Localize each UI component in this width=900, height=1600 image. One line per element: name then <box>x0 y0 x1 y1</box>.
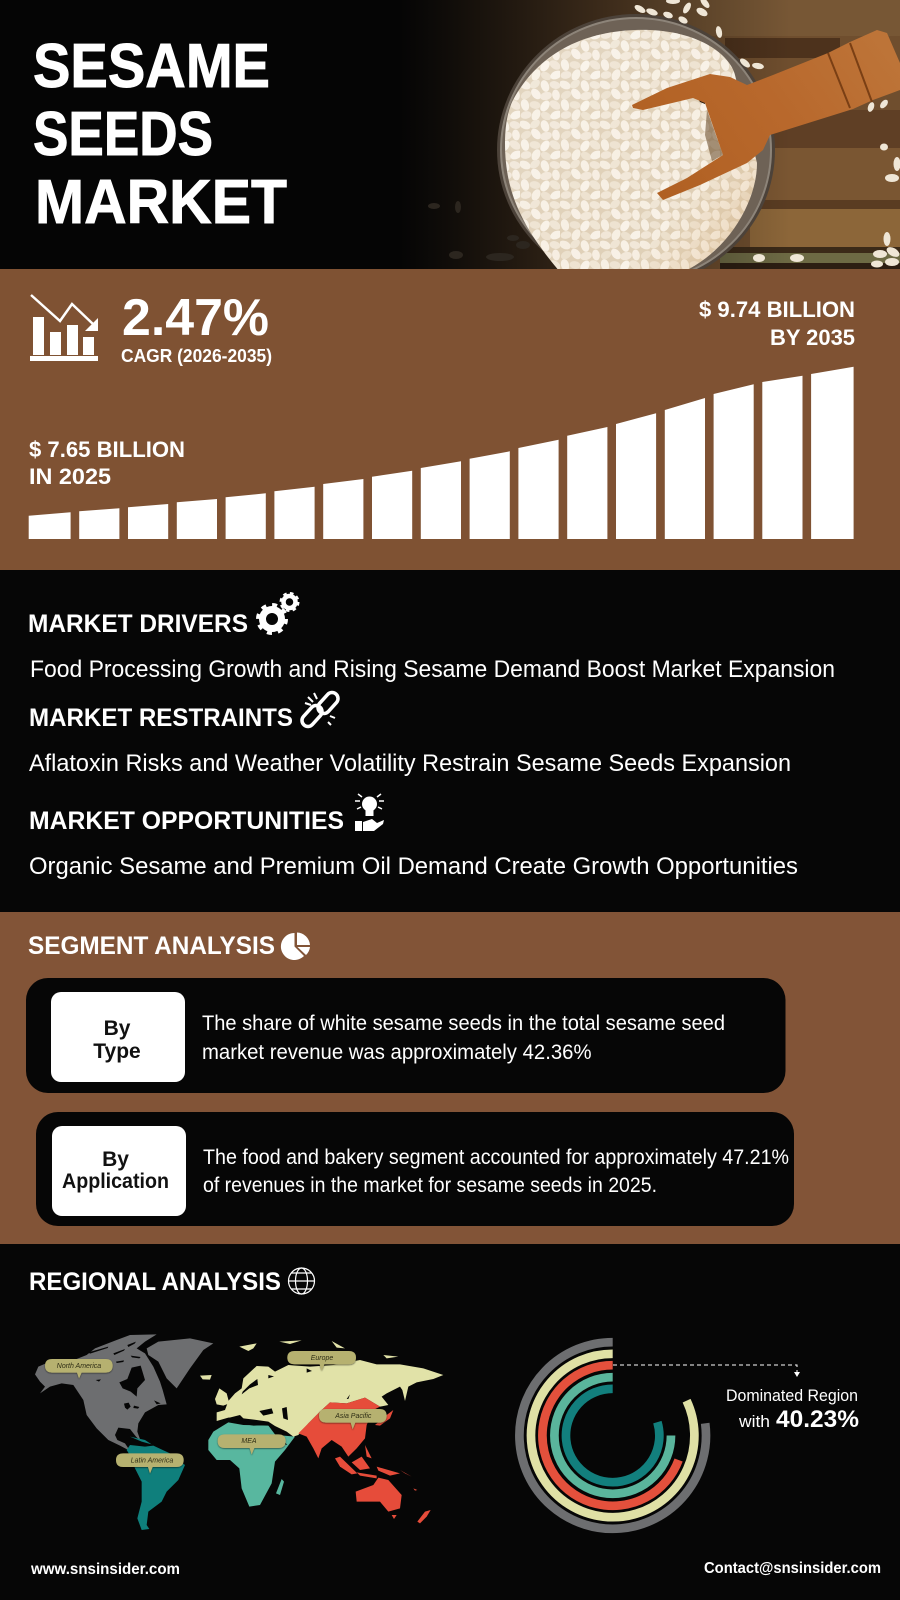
text: by application: The food and bakery segment accounted for approximately 47.21% <box>203 1146 789 1169</box>
icon: broken chain link <box>300 690 340 729</box>
2025 value label <box>29 437 185 489</box>
2035 value label: BY 2035 <box>770 325 855 350</box>
map callouts <box>45 1351 387 1474</box>
callout: North America: North America <box>57 1363 101 1370</box>
label box: by type: Type <box>93 1040 141 1063</box>
heading: segment analysis: SEGMENT ANALYSIS <box>28 932 275 960</box>
region: Asia Pacific <box>298 1398 431 1523</box>
label box: by application: Application <box>62 1170 169 1193</box>
callout: MEA: MEA <box>241 1438 257 1445</box>
region: Middle East and Africa <box>208 1422 295 1507</box>
icon: globe <box>288 1268 314 1294</box>
text: by application: of revenues in the market for sesame seeds in 2025. <box>203 1174 657 1197</box>
CAGR label: CAGR (2026-2035) <box>121 346 272 366</box>
label box: by application <box>52 1126 186 1216</box>
callout: Europe <box>287 1351 356 1371</box>
panel: segment analysis <box>0 912 900 1244</box>
map: Caribbean islands <box>130 1437 152 1444</box>
callout: MEA <box>218 1434 286 1455</box>
map: Europe, Africa, Asia, Oceania <box>208 1340 443 1523</box>
callout: Europe: Europe <box>311 1355 333 1362</box>
callout: Asia Pacific <box>319 1409 387 1429</box>
CAGR value: 2.47% <box>122 289 269 347</box>
title <box>33 32 287 237</box>
card: by type <box>26 978 786 1093</box>
2025 value label: IN 2025 <box>29 464 111 489</box>
callout: Latin America: Latin America <box>131 1458 173 1465</box>
callout: Latin America <box>116 1453 184 1474</box>
map gaps: Canadian waters and lakes <box>88 1342 161 1410</box>
text: by type: The share of white sesame seeds in the total sesame seed <box>202 1012 725 1035</box>
icon: light bulb over hand <box>355 794 384 831</box>
panel: market dynamics <box>0 570 900 912</box>
panel: market size <box>0 269 900 570</box>
map gaps: inland seas <box>227 1368 350 1445</box>
text: by type <box>202 1012 725 1064</box>
title: SESAME <box>33 32 270 101</box>
title: MARKET <box>35 168 287 237</box>
panel: header <box>33 0 900 286</box>
2035 value label: $ 9.74 BILLION <box>699 297 855 322</box>
heading: market drivers: MARKET DRIVERS <box>28 610 248 638</box>
2025 value label: $ 7.65 BILLION <box>29 437 185 462</box>
text: drivers: Food Processing Growth and Rising Sesame Demand Boost Market Expansion <box>30 656 835 683</box>
title: SEEDS <box>33 100 213 169</box>
card: by application <box>36 1112 794 1226</box>
icon: gears <box>258 594 298 633</box>
heading: regional analysis: REGIONAL ANALYSIS <box>29 1268 281 1296</box>
label box: by type <box>51 992 185 1082</box>
radial bar chart <box>519 1342 706 1529</box>
arrow: dashed leader line <box>613 1365 800 1377</box>
header photo: bowl of sesame seeds with wooden scoop <box>400 0 900 286</box>
region: Latin America <box>127 1445 185 1530</box>
panel: regional analysis <box>0 1244 900 1600</box>
region: North America <box>35 1334 213 1451</box>
text: by type: market revenue was approximately 42.36% <box>202 1041 592 1064</box>
2035 value label <box>699 297 855 350</box>
callout: dominated region <box>726 1386 859 1433</box>
region: Europe and Russia <box>215 1340 443 1437</box>
text: restraints: Aflatoxin Risks and Weather Volatility Restrain Sesame Seeds Expansion <box>29 750 791 777</box>
footer: contact email: Contact@snsinsider.com <box>704 1560 881 1577</box>
icon: chart with falling arrow <box>30 295 98 361</box>
label box: by type: By <box>104 1017 131 1040</box>
world map <box>35 1334 443 1530</box>
map: Iceland <box>200 1375 212 1380</box>
icon: pie chart <box>281 932 310 960</box>
bar chart: market growth <box>29 367 854 539</box>
callout: North America <box>45 1359 113 1379</box>
callout: Asia Pacific: Asia Pacific <box>334 1413 372 1420</box>
heading: market restraints: MARKET RESTRAINTS <box>29 704 293 732</box>
text: opportunities: Organic Sesame and Premium Oil Demand Create Growth Opportunities <box>29 853 798 880</box>
callout: dominated region: Dominated Region <box>726 1386 858 1405</box>
label box: by application: By <box>102 1148 129 1171</box>
callout: dominated region: 40.23% <box>776 1406 859 1433</box>
footer: website: www.snsinsider.com <box>30 1561 180 1578</box>
map: Americas <box>35 1334 213 1530</box>
text: by application <box>203 1146 789 1197</box>
callout: dominated region: with <box>738 1412 770 1431</box>
heading: market opportunities: MARKET OPPORTUNITIES <box>29 807 344 835</box>
